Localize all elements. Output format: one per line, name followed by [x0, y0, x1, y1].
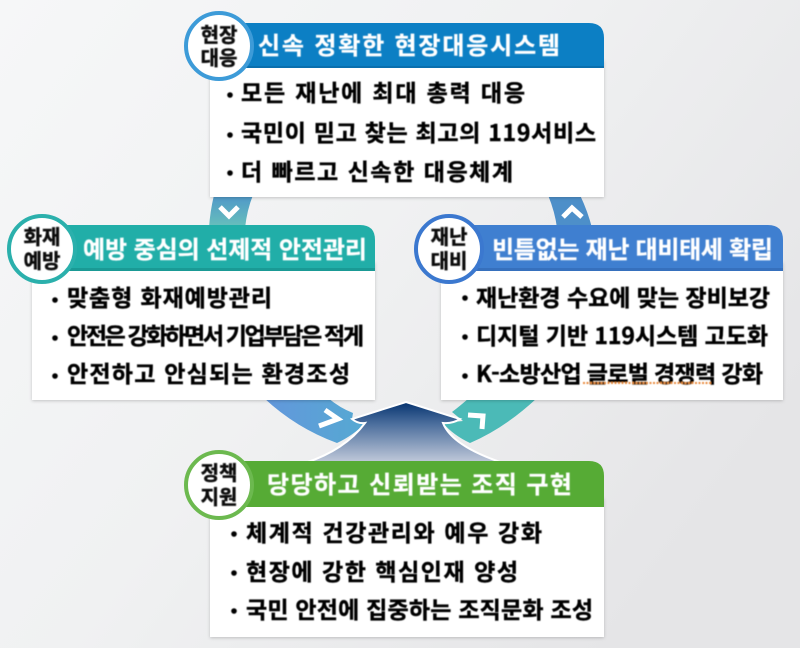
list: fire prevention: 맞춤형 화재예방관리	[67, 279, 272, 313]
list: field response: 국민이 믿고 찾는 최고의 119서비스	[241, 114, 596, 148]
list: disaster preparedness: K-소방산업 글로벌 경쟁력 강화	[476, 355, 763, 389]
badge: disaster preparedness: 대비	[431, 245, 467, 274]
badge: policy support: 지원	[201, 481, 237, 510]
list: disaster preparedness	[462, 279, 770, 389]
list: fire prevention: 안전은 강화하면서 기업부담은 적게	[67, 317, 364, 351]
panel: fire prevention	[9, 216, 375, 400]
panel: field response	[186, 13, 604, 197]
list: policy support: 체계적 건강관리와 예우 강화	[246, 514, 542, 548]
arc arrow: bottom-right, support to preparedness	[443, 398, 537, 443]
header: policy support: 당당하고 신뢰받는 조직 구현	[267, 465, 572, 500]
header: fire prevention	[60, 225, 375, 271]
list: policy support: 국민 안전에 집중하는 조직문화 조성	[246, 591, 593, 625]
badge: fire prevention	[9, 216, 75, 282]
icon: chevron up	[563, 208, 582, 217]
badge: field response: 현장	[201, 19, 237, 48]
list: disaster preparedness: 재난환경 수요에 맞는 장비보강	[476, 279, 770, 313]
icon: chevron down	[220, 207, 238, 216]
badge: field response: 대응	[201, 42, 237, 71]
list: disaster preparedness: 디지털 기반 119시스템 고도화	[476, 317, 768, 351]
list: policy support	[231, 514, 593, 625]
icon: chevron right	[319, 410, 338, 426]
list: field response	[227, 74, 596, 187]
badge: disaster preparedness	[416, 216, 482, 282]
header: disaster preparedness: 빈틈없는 재난 대비태세 확립	[492, 230, 773, 265]
header: field response: 신속 정확한 현장대응시스템	[258, 26, 560, 61]
arc arrow: top-right, preparedness to response	[548, 195, 592, 228]
header: fire prevention: 예방 중심의 선제적 안전관리	[83, 230, 367, 265]
badge: fire prevention: 예방	[24, 245, 60, 274]
icon: chevron corner	[468, 415, 483, 429]
header: policy support	[235, 461, 604, 507]
list: fire prevention: 안전하고 안심되는 환경조성	[67, 355, 350, 389]
badge: policy support: 정책	[201, 457, 237, 486]
badge: fire prevention: 화재	[24, 221, 60, 250]
arc arrow: bottom-left, prevention to support	[264, 398, 365, 443]
list: fire prevention	[52, 279, 364, 389]
arc arrow: top-left, response to prevention	[209, 195, 253, 228]
badge: disaster preparedness: 재난	[431, 221, 467, 250]
list: field response: 모든 재난에 최대 총력 대응	[241, 74, 525, 108]
central upward arrow	[305, 402, 503, 463]
panel: policy support	[186, 452, 604, 637]
header: disaster preparedness	[470, 225, 783, 271]
badge: policy support	[186, 452, 252, 518]
list: field response: 더 빠르고 신속한 대응체계	[241, 153, 513, 187]
header: field response	[235, 23, 604, 68]
panel: disaster preparedness	[416, 216, 783, 400]
badge: field response	[186, 13, 252, 79]
list: policy support: 현장에 강한 핵심인재 양성	[246, 553, 518, 587]
